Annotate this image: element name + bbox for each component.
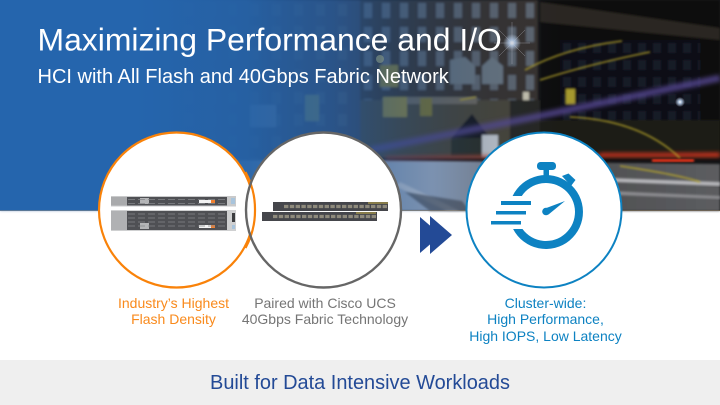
- footer band: [0, 360, 720, 405]
- background photo: night street: [0, 0, 720, 211]
- panel: flash density circle: [99, 132, 254, 288]
- server: upper rack unit: [111, 196, 236, 206]
- caption: cluster-wide: High IOPS, Low Latency: [469, 328, 622, 344]
- caption: fabric technology: Paired with Cisco UCS: [254, 295, 396, 311]
- panel: fabric switch circle: [246, 132, 401, 288]
- switch: upper: [273, 202, 388, 211]
- caption: cluster-wide: High Performance,: [487, 311, 604, 327]
- arrow: double chevron: [420, 216, 452, 254]
- road: [0, 160, 720, 211]
- blue fade overlay: [0, 0, 720, 211]
- server: lower rack unit: [111, 210, 236, 231]
- subtitle: HCI with All Flash and 40Gbps Fabric Network: [38, 66, 450, 88]
- panel: performance circle: [466, 132, 622, 288]
- light trails: [370, 78, 720, 158]
- caption: flash density: Flash Density: [131, 311, 216, 327]
- icon: stopwatch: [491, 162, 583, 249]
- title: Maximizing Performance and I/O: [38, 22, 502, 58]
- footer text: Built for Data Intensive Workloads: [210, 372, 510, 394]
- caption: fabric technology: 40Gbps Fabric Technology: [242, 311, 408, 327]
- caption: flash density: Industry’s Highest: [118, 295, 229, 311]
- caption: cluster-wide: Cluster-wide:: [505, 295, 586, 311]
- switch: lower: [262, 212, 377, 221]
